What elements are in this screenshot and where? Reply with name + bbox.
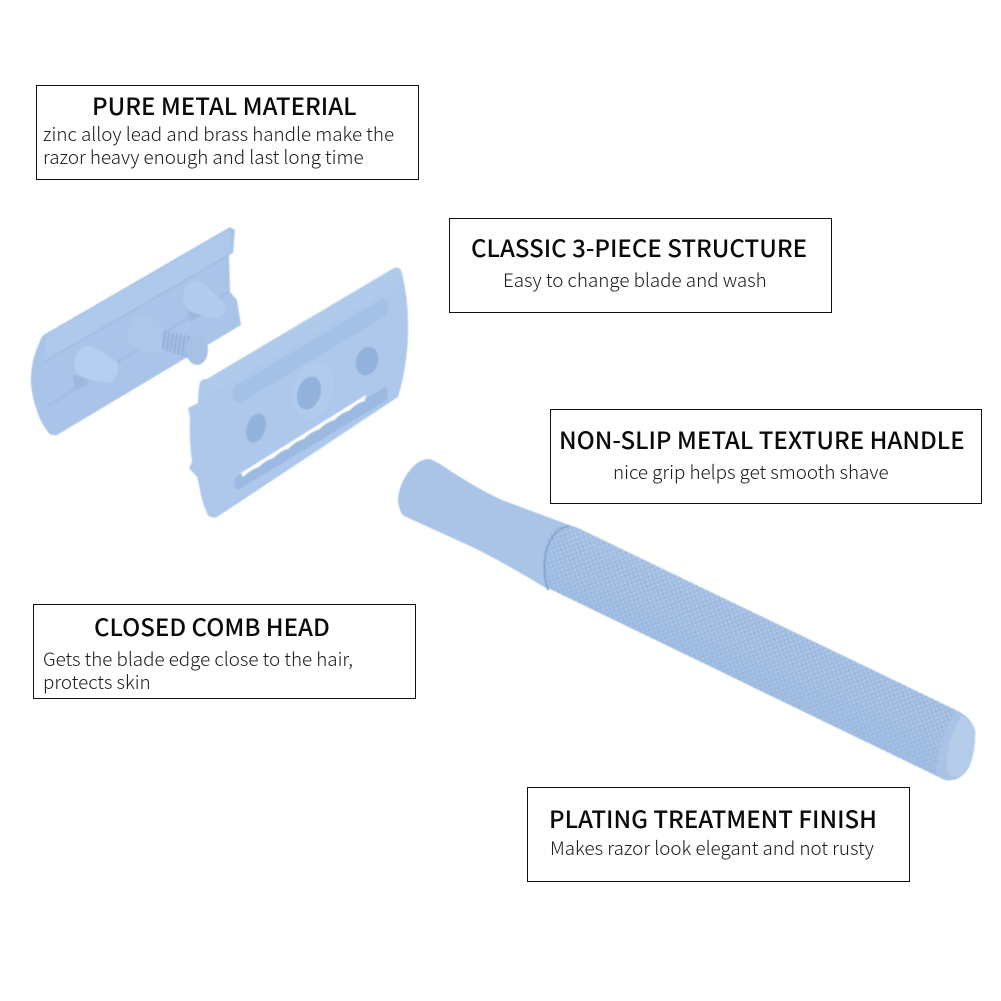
left hole xyxy=(243,411,269,445)
description: nice grip helps get smooth shave xyxy=(613,458,889,485)
pin: right xyxy=(183,280,226,322)
description: Makes razor look elegant and not rusty xyxy=(550,834,874,861)
heading: PURE METAL MATERIAL xyxy=(92,87,357,122)
right hole xyxy=(352,344,382,378)
description: zinc alloy lead and brass handle make the xyxy=(43,120,394,146)
description xyxy=(43,120,394,170)
top slot xyxy=(233,299,388,403)
description: Easy to change blade and wash xyxy=(503,266,767,293)
callout: closed comb head xyxy=(33,604,416,699)
heading: NON-SLIP METAL TEXTURE HANDLE xyxy=(559,421,965,456)
heading: PLATING TREATMENT FINISH xyxy=(549,800,877,835)
center hole xyxy=(284,355,342,425)
knurled grip xyxy=(543,526,975,780)
description: razor heavy enough and last long time xyxy=(43,142,364,170)
callout: pure metal material xyxy=(36,85,419,180)
description: Gets the blade edge close to the hair, xyxy=(43,645,353,672)
handle end cap xyxy=(936,711,975,780)
handle xyxy=(398,459,975,780)
back plate xyxy=(31,227,241,435)
comb slot xyxy=(234,387,388,490)
heading: CLASSIC 3-PIECE STRUCTURE xyxy=(471,229,807,264)
description xyxy=(43,645,353,694)
callout: plating finish xyxy=(527,787,910,882)
callout: classic structure xyxy=(449,218,832,313)
heading: CLOSED COMB HEAD xyxy=(94,608,330,643)
threaded screw xyxy=(127,314,208,365)
description: protects skin xyxy=(43,668,151,694)
pin: left xyxy=(72,346,118,390)
front comb cap xyxy=(188,268,408,518)
callout: non-slip handle xyxy=(550,409,982,504)
